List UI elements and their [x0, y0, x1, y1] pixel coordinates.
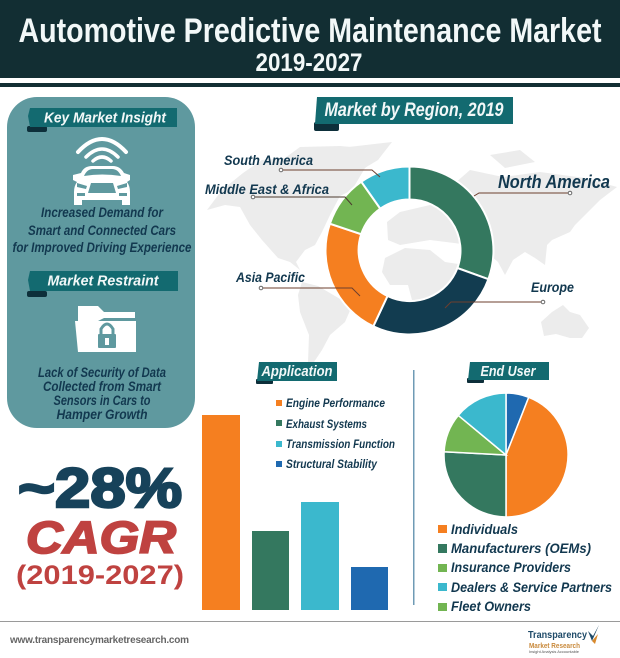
text: insight: Increased Demand for [41, 205, 164, 220]
stat: CAGR period: (2019-2027) [16, 560, 184, 590]
text: insight: Smart and Connected Cars [28, 223, 176, 238]
logo: Transparency Market Research [528, 625, 599, 654]
legend: end user: Manufacturers (OEMs) [451, 540, 591, 556]
label: North America [474, 172, 610, 196]
label: South America [224, 152, 380, 177]
legend: application: Transmission Function [286, 439, 395, 451]
badge: Market Restraint: Market Restraint [48, 272, 159, 290]
logo: Transparency Market Research: Insight Analysis Accountable [529, 650, 579, 654]
legend: application: Engine Performance [286, 398, 386, 410]
left panel: insights [7, 97, 195, 428]
icon: connected car with wifi [73, 139, 130, 205]
text: restraint: Hamper Growth [56, 407, 148, 422]
legend: end user: Individuals [451, 521, 518, 537]
label: Europe [445, 279, 574, 308]
legend: end user [438, 521, 612, 614]
segment: North America [410, 166, 493, 279]
badge: Market by Region: Market by Region, 2019 [324, 100, 504, 121]
text: restraint: Sensors in Cars to [54, 393, 150, 408]
segment: Middle East & Africa [330, 182, 380, 234]
world map background [207, 142, 617, 362]
segment: Europe [373, 268, 488, 334]
legend: end user: Fleet Owners [451, 598, 531, 614]
badge: Key Market Insight: Key Market Insight [44, 110, 167, 126]
badge: Market by Region [314, 97, 513, 131]
segment: Asia Pacific [326, 224, 388, 326]
badge: Key Market Insight [27, 108, 177, 132]
header band [0, 0, 620, 87]
donut chart: market by region [326, 166, 493, 334]
legend: application [276, 398, 395, 471]
text: restraint: Lack of Security of Data [38, 365, 166, 380]
segment: South America [361, 166, 410, 209]
label: Middle East & Africa: Middle East & Africa [205, 181, 329, 197]
badge: End User [467, 362, 549, 383]
stat: CAGR value: ~28% [18, 456, 182, 519]
text: restraint [38, 365, 166, 422]
label: North America: North America [498, 172, 610, 192]
label: Asia Pacific [235, 269, 360, 296]
label: South America: South America [224, 152, 313, 168]
badge: End User: End User [480, 364, 537, 380]
badge: Application [256, 362, 337, 384]
text: insight [12, 205, 192, 255]
legend: application: Structural Stability [286, 459, 378, 471]
badge: Market Restraint [27, 271, 178, 297]
legend: end user: Insurance Providers [451, 559, 571, 575]
logo: Transparency Market Research: Market Research [529, 641, 580, 650]
subtitle: years: 2019-2027 [256, 49, 362, 77]
stat: CAGR label: CAGR [26, 512, 177, 563]
badge: Application: Application [261, 363, 332, 380]
text: insight: for Improved Driving Experience [12, 240, 192, 255]
footer: website: www.transparencymarketresearch.com [9, 635, 189, 646]
icon: folder with padlock [75, 306, 136, 352]
logo: Transparency Market Research: Transparency [528, 629, 587, 641]
label: Asia Pacific: Asia Pacific [235, 269, 305, 285]
legend: application: Exhaust Systems [286, 419, 367, 431]
bar chart: application [202, 415, 388, 610]
label: Middle East & Africa [205, 181, 352, 205]
text: restraint: Collected from Smart [43, 379, 161, 394]
label: Europe: Europe [531, 279, 574, 295]
pie chart: end user [444, 393, 568, 517]
